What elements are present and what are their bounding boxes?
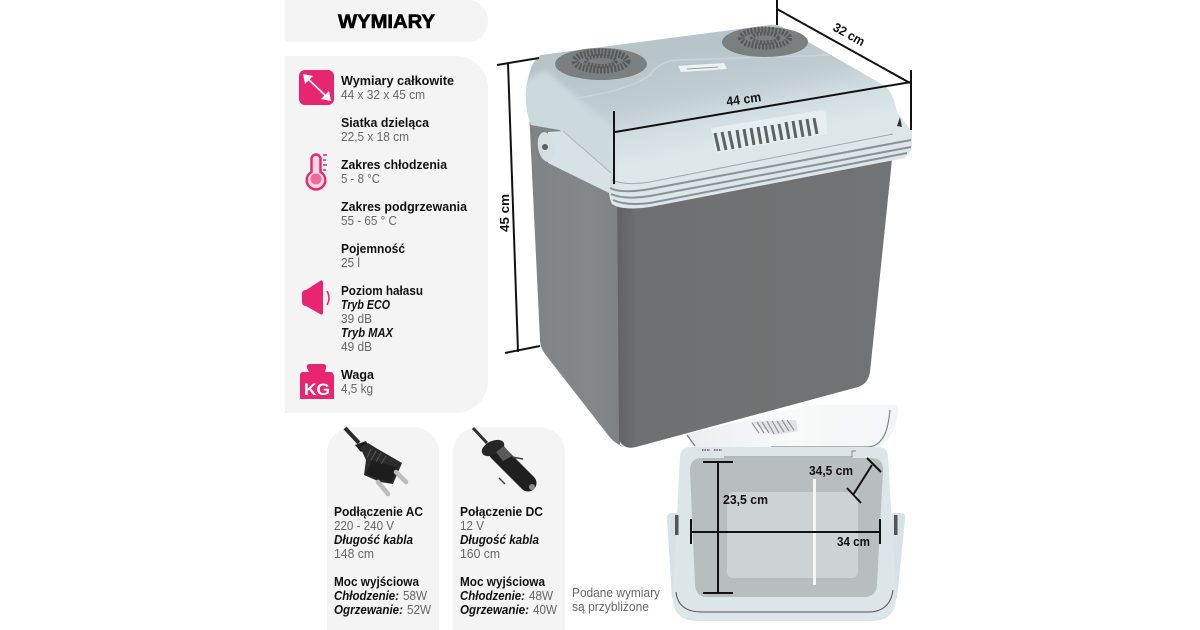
text: DC specifications: 160 cm <box>460 546 500 561</box>
handle <box>536 131 611 193</box>
text: DC specifications <box>460 504 558 617</box>
title: WYMIARY <box>338 12 435 33</box>
text: DC specifications: Połączenie DC <box>460 504 544 519</box>
text: AC specifications: 220 - 240 V <box>334 518 394 533</box>
spec: noise level: 39 dB <box>341 311 372 326</box>
dimension: width 44 cm <box>614 82 911 184</box>
note: approximate dimensions: są przybliżone <box>572 599 649 614</box>
cooler front face <box>617 140 894 448</box>
panel: specifications <box>285 56 488 413</box>
front vent <box>711 110 827 153</box>
spec: cooling range: 5 - 8 °C <box>341 171 380 186</box>
dimension: width 34 cm: 34 cm <box>837 534 870 549</box>
icon: thermometer <box>307 154 327 189</box>
lid recess contour <box>578 55 830 98</box>
spec: capacity: Pojemność <box>341 241 405 256</box>
panel: DC connection <box>453 427 565 630</box>
text: AC specifications: 52W <box>407 602 432 617</box>
text: DC specifications: Chłodzenie: <box>460 588 525 603</box>
dimension: diagonal 34,5 cm <box>809 458 881 503</box>
spec: divider grid: Siatka dzieląca <box>341 115 430 130</box>
text: DC specifications: Długość kabla <box>460 532 539 547</box>
spec: noise level: Poziom hałasu <box>341 283 423 298</box>
dimension: diagonal 34,5 cm: 34,5 cm <box>809 463 853 478</box>
spec: overall dimensions: Wymiary całkowite <box>341 73 454 88</box>
icon: AC plug <box>345 428 406 494</box>
spec: weight <box>341 367 375 396</box>
text: DC specifications: 40W <box>533 602 558 617</box>
side handles <box>667 513 680 598</box>
spec: noise level <box>341 283 423 354</box>
dimension: width 34 cm <box>691 519 880 549</box>
spec: heating range: Zakres podgrzewania <box>341 199 468 214</box>
spec: noise level: 49 dB <box>341 339 372 354</box>
lid <box>526 25 912 208</box>
note: approximate dimensions <box>572 585 660 614</box>
text: AC specifications: 58W <box>403 588 428 603</box>
spec: divider grid <box>341 115 430 144</box>
spec: noise level: Tryb MAX <box>341 325 394 340</box>
spec: weight: 4,5 kg <box>341 381 373 396</box>
brand label <box>678 63 727 72</box>
icon: KG weight <box>300 364 334 399</box>
text: AC specifications: Podłączenie AC <box>334 504 424 519</box>
spec: capacity: 25 l <box>341 255 360 270</box>
icon: KG weight: KG <box>304 380 330 399</box>
dimension: depth 23,5 cm: 23,5 cm <box>723 492 768 507</box>
text: DC specifications: 12 V <box>460 518 484 533</box>
cooler side face <box>529 110 630 448</box>
spec: capacity <box>341 241 405 270</box>
illustration: closed cooler <box>497 0 912 448</box>
heading panel: WYMIARY <box>285 0 488 42</box>
text: AC specifications: Długość kabla <box>334 532 413 547</box>
spec: heating range: 55 - 65 ° C <box>341 213 397 228</box>
text: AC specifications: 148 cm <box>334 546 374 561</box>
left fan grille <box>555 48 647 80</box>
spec: cooling range: Zakres chłodzenia <box>341 157 448 172</box>
open lid <box>686 405 898 449</box>
dimension: width 44 cm: 44 cm <box>725 89 762 109</box>
dimension: depth 23,5 cm <box>703 462 768 593</box>
dimension: height 45 cm: 45 cm <box>497 194 512 232</box>
lid seam and rim ridges <box>612 134 893 184</box>
icon: speaker <box>302 280 329 315</box>
spec: divider grid: 22,5 x 18 cm <box>341 129 409 144</box>
text: AC specifications: Chłodzenie: <box>334 588 399 603</box>
spec: noise level: Tryb ECO <box>341 297 390 312</box>
spec: overall dimensions <box>341 73 454 102</box>
text: AC specifications: Ogrzewanie: <box>334 602 403 617</box>
text: AC specifications: Moc wyjściowa <box>334 574 420 589</box>
dimension: depth 32 cm: 32 cm <box>831 20 868 49</box>
lid left shoulder <box>526 71 614 185</box>
spec: overall dimensions: 44 x 32 x 45 cm <box>341 87 425 102</box>
text: AC specifications <box>334 504 432 617</box>
text: DC specifications: Ogrzewanie: <box>460 602 529 617</box>
cooler interior <box>690 458 883 597</box>
panel: AC connection <box>327 427 439 630</box>
spec: cooling range <box>341 157 448 186</box>
icon: DC car plug <box>473 428 535 490</box>
text: DC specifications: Moc wyjściowa <box>460 574 546 589</box>
text: DC specifications: 48W <box>529 588 554 603</box>
spec: weight: Waga <box>341 367 375 382</box>
spec: heating range <box>341 199 468 228</box>
icon: diagonal dimensions arrow <box>299 70 334 105</box>
right fan grille <box>722 27 808 57</box>
illustration: open cooler from above <box>667 405 905 621</box>
dimension: height 45 cm <box>497 58 540 353</box>
cooler rim <box>673 447 896 621</box>
divider slot <box>813 479 816 585</box>
dimension: depth 32 cm <box>777 0 911 130</box>
note: approximate dimensions: Podane wymiary <box>572 585 660 600</box>
